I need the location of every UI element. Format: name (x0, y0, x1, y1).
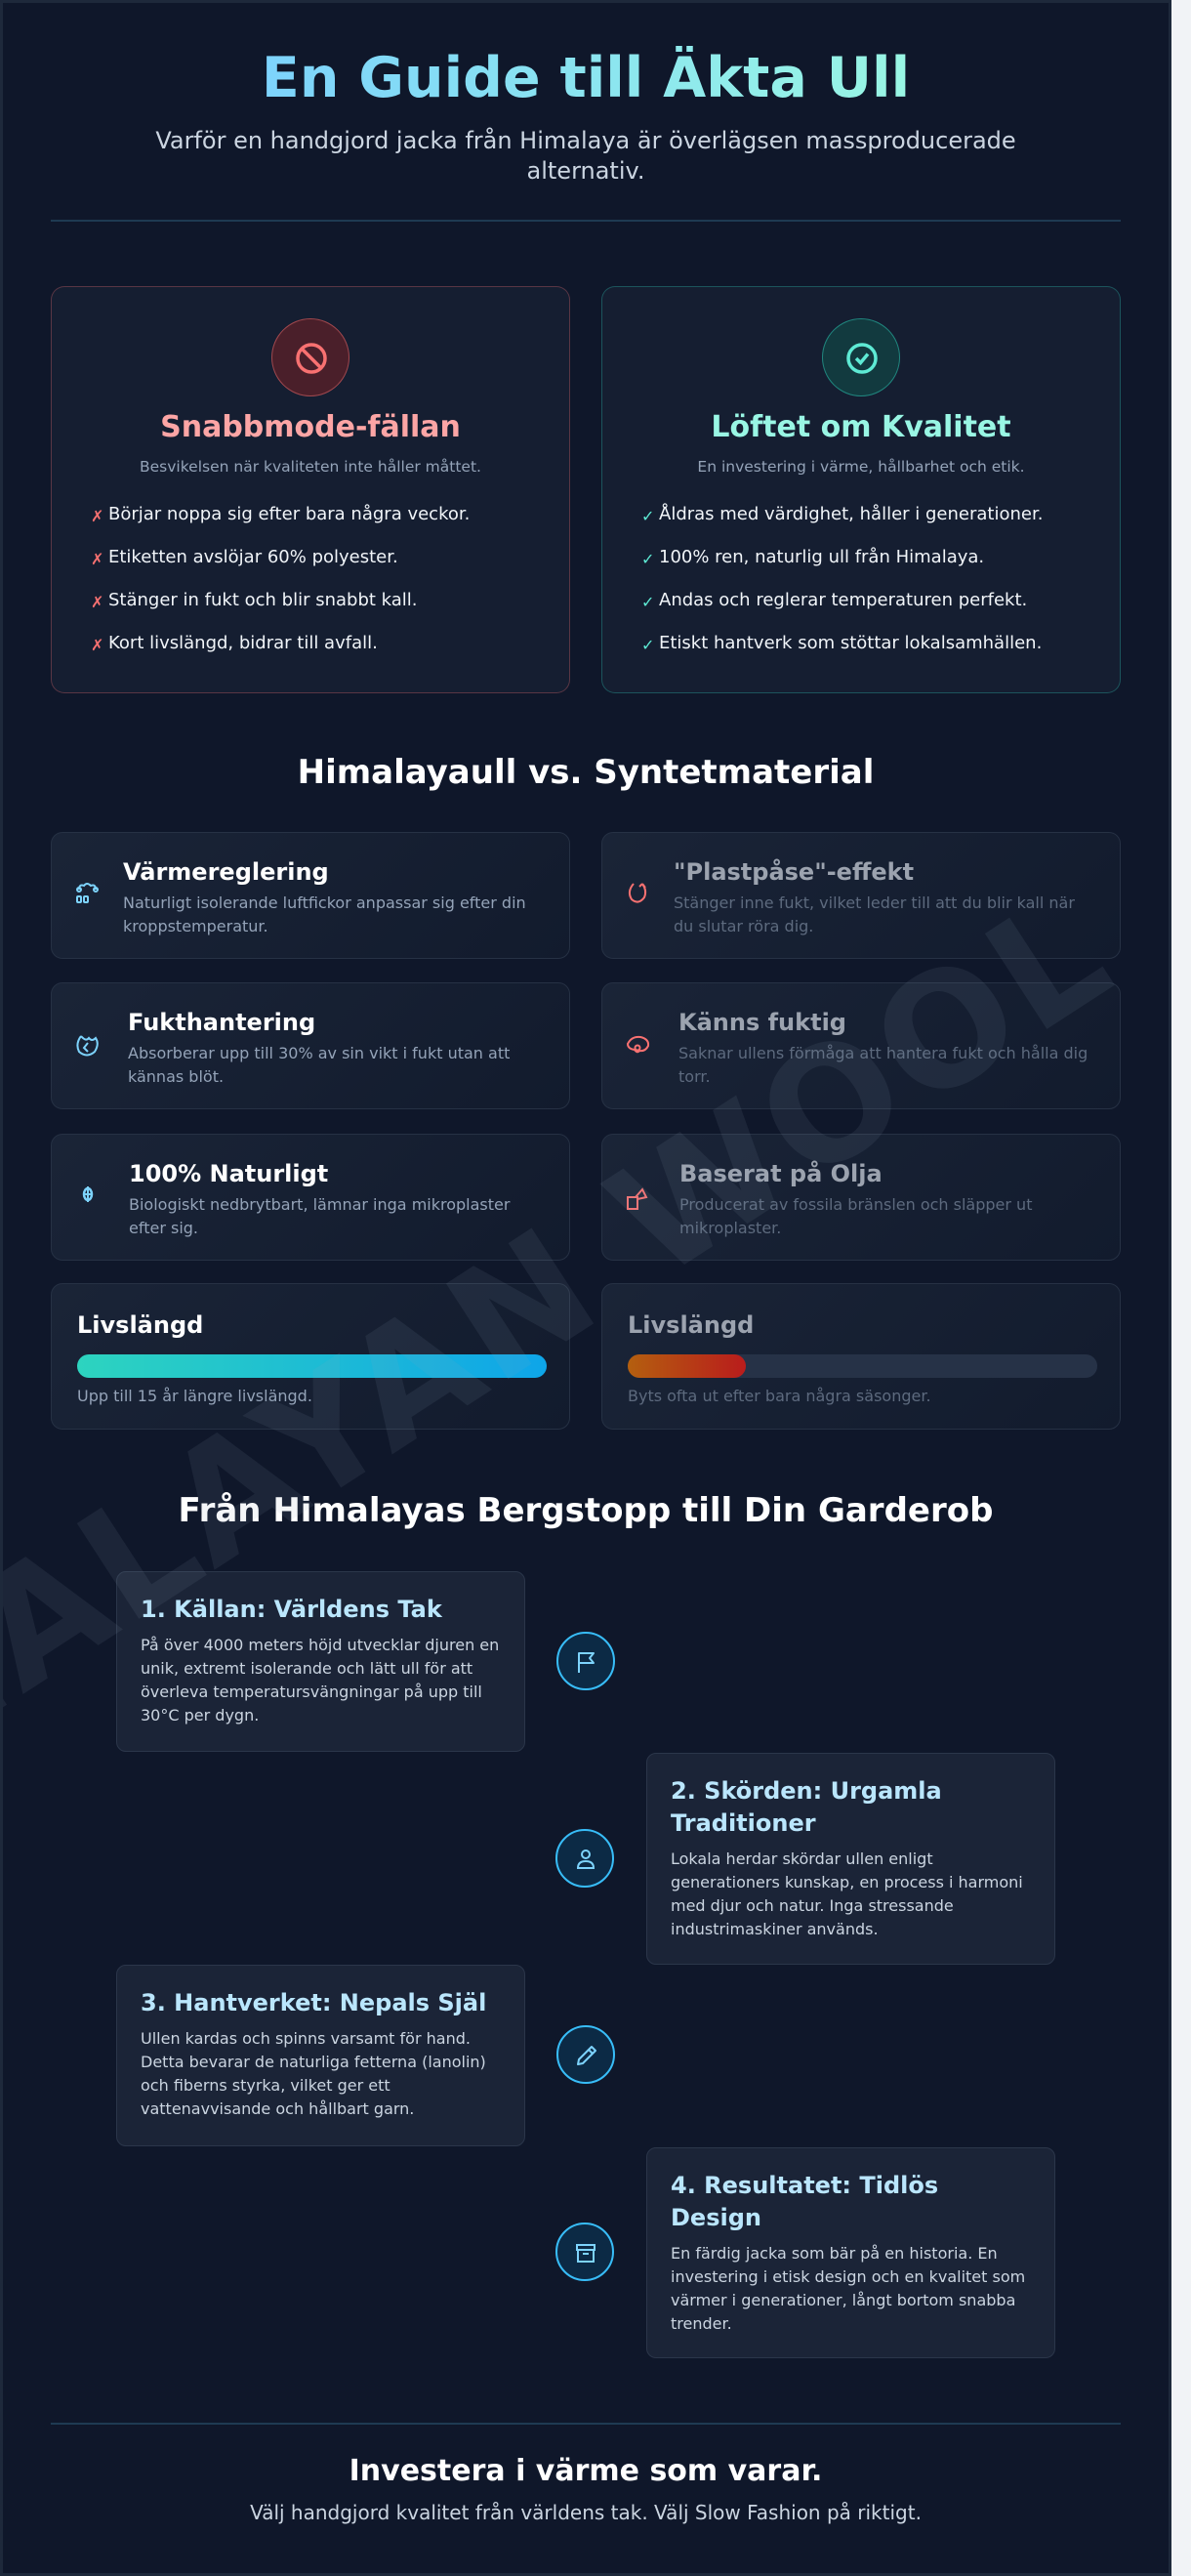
list: benefits: ✓ (641, 636, 654, 654)
icon: drop (76, 1035, 99, 1057)
step 1 (116, 1571, 525, 1752)
icon: pencil (556, 2025, 615, 2084)
list: benefits: Etiskt hantverk som stöttar lokalsamhällen. (659, 633, 1042, 653)
card: lifespan synthetic: Byts ofta ut efter bara några säsonger. (628, 1387, 931, 1405)
card: oil based (601, 1134, 1121, 1261)
list: benefits: Åldras med värdighet, håller i generationer. (659, 504, 1043, 524)
card: moisture handling: Absorberar upp till 30% av sin vikt i fukt utan att kännas blöt. (128, 1044, 510, 1086)
icon: flag (556, 1632, 615, 1690)
icon: prohibited (271, 318, 349, 396)
card: natural: Biologiskt nedbrytbart, lämnar inga mikroplaster efter sig. (129, 1195, 510, 1237)
card: thermoregulation: Värmereglering (123, 858, 329, 886)
bar: wool lifespan (77, 1354, 547, 1378)
list: problems (91, 504, 470, 654)
footer text: Välj handgjord kvalitet från världens tak. Välj Slow Fashion på riktigt. (250, 2501, 922, 2524)
list: problems: ✗ (91, 507, 103, 525)
card: lifespan synthetic: Livslängd (628, 1311, 754, 1339)
card: lifespan wool (51, 1283, 570, 1430)
step 2: 2. Skörden: Urgamla Traditioner (671, 1777, 942, 1837)
subtitle: alternativ. (527, 157, 644, 185)
card: lifespan wool: Upp till 15 år längre livslängd. (77, 1387, 312, 1405)
list: benefits: ✓ (641, 507, 654, 525)
card: lifespan synthetic (601, 1283, 1121, 1430)
subtitle (155, 127, 1016, 185)
panel: fast fashion trap (51, 286, 570, 693)
step 4: En färdig jacka som bär på en historia. En investering i etisk design och en kvalitet som värmer i generationer, långt bortom snabba trender. (671, 2244, 1025, 2333)
list: benefits (641, 503, 1043, 654)
card: natural: 100% Naturligt (129, 1160, 328, 1187)
step 2: Lokala herdar skördar ullen enligt generationers kunskap, en process i harmoni med djur och natur. Inga stressande industrimaskiner används. (671, 1849, 1023, 1938)
list: benefits: Andas och reglerar temperaturen perfekt. (659, 590, 1027, 610)
card: natural (51, 1134, 570, 1261)
heading: Snabbmode-fällan (160, 410, 461, 444)
card: plastic bag effect: Stänger inne fukt, vilket leder till att du blir kall när du slutar röra dig. (674, 893, 1075, 935)
list: benefits: ✓ (641, 593, 654, 611)
card: oil based: Baserat på Olja (679, 1160, 883, 1187)
list: problems: Etiketten avslöjar 60% polyester. (108, 547, 398, 567)
list: problems: ✗ (91, 636, 103, 654)
icon: leaf (82, 1186, 94, 1202)
icon: check (822, 318, 900, 396)
step 1: På över 4000 meters höjd utvecklar djuren en unik, extremt isolerande och lätt ull för att överleva temperatursvängningar på upp till 30°C per dygn. (141, 1636, 499, 1724)
footer heading: Investera i värme som varar. (349, 2454, 822, 2488)
icon: person (555, 1829, 614, 1888)
list: benefits: ✓ (641, 550, 654, 568)
step 3: Ullen kardas och spinns varsamt för hand. Detta bevarar de naturliga fetterna (lanolin) och fiberns styrka, vilket ger ett vattenavvisande och hållbart garn. (141, 2029, 486, 2118)
title: En Guide till Äkta Ull (262, 46, 910, 110)
card: lifespan wool: Livslängd (77, 1311, 203, 1339)
subheading: En investering i värme, hållbarhet och etik. (697, 458, 1025, 476)
heading: journey: Från Himalayas Bergstopp till Din Garderob (179, 1491, 993, 1530)
step 3 (116, 1965, 525, 2146)
list: benefits: 100% ren, naturlig ull från Himalaya. (659, 547, 984, 567)
step 4 (646, 2147, 1055, 2358)
card: plastic bag effect (601, 832, 1121, 959)
icon: archive (555, 2223, 614, 2281)
step 3: 3. Hantverket: Nepals Själ (141, 1989, 486, 2016)
panel: quality promise (601, 286, 1121, 693)
list: problems: Kort livslängd, bidrar till avfall. (108, 633, 378, 653)
step 4: 4. Resultatet: Tidlös Design (671, 2172, 938, 2231)
bar: synthetic lifespan (628, 1354, 1097, 1378)
step 2 (646, 1753, 1055, 1965)
card: plastic bag effect: "Plastpåse"-effekt (674, 858, 914, 886)
icon: loop (629, 883, 646, 903)
card: moisture handling: Fukthantering (128, 1009, 315, 1036)
card: oil based: Producerat av fossila bränslen och släpper ut mikroplaster. (679, 1195, 1032, 1237)
heading: comparison: Himalayaull vs. Syntetmaterial (298, 753, 874, 792)
icon: damp (627, 1035, 650, 1053)
list: problems: Börjar noppa sig efter bara några veckor. (108, 504, 470, 524)
heading: Löftet om Kvalitet (711, 410, 1011, 444)
card: feels damp (601, 982, 1121, 1109)
card: thermoregulation (51, 832, 570, 959)
card: thermoregulation: Naturligt isolerande luftfickor anpassar sig efter din kroppstemperatur. (123, 893, 526, 935)
list: problems: ✗ (91, 593, 103, 611)
card: feels damp: Saknar ullens förmåga att hantera fukt och hålla dig torr. (678, 1044, 1088, 1086)
list: problems: Stänger in fukt och blir snabbt kall. (108, 590, 418, 610)
list: problems: ✗ (91, 550, 103, 568)
card: feels damp: Känns fuktig (678, 1009, 846, 1036)
card: moisture handling (51, 982, 570, 1109)
step 1: 1. Källan: Världens Tak (141, 1596, 442, 1623)
icon: thermo (76, 883, 99, 903)
icon: oil (627, 1187, 648, 1210)
subtitle: Varför en handgjord jacka från Himalaya är överlägsen massproducerade (155, 127, 1016, 154)
subheading: Besvikelsen när kvaliteten inte håller måttet. (140, 458, 481, 476)
